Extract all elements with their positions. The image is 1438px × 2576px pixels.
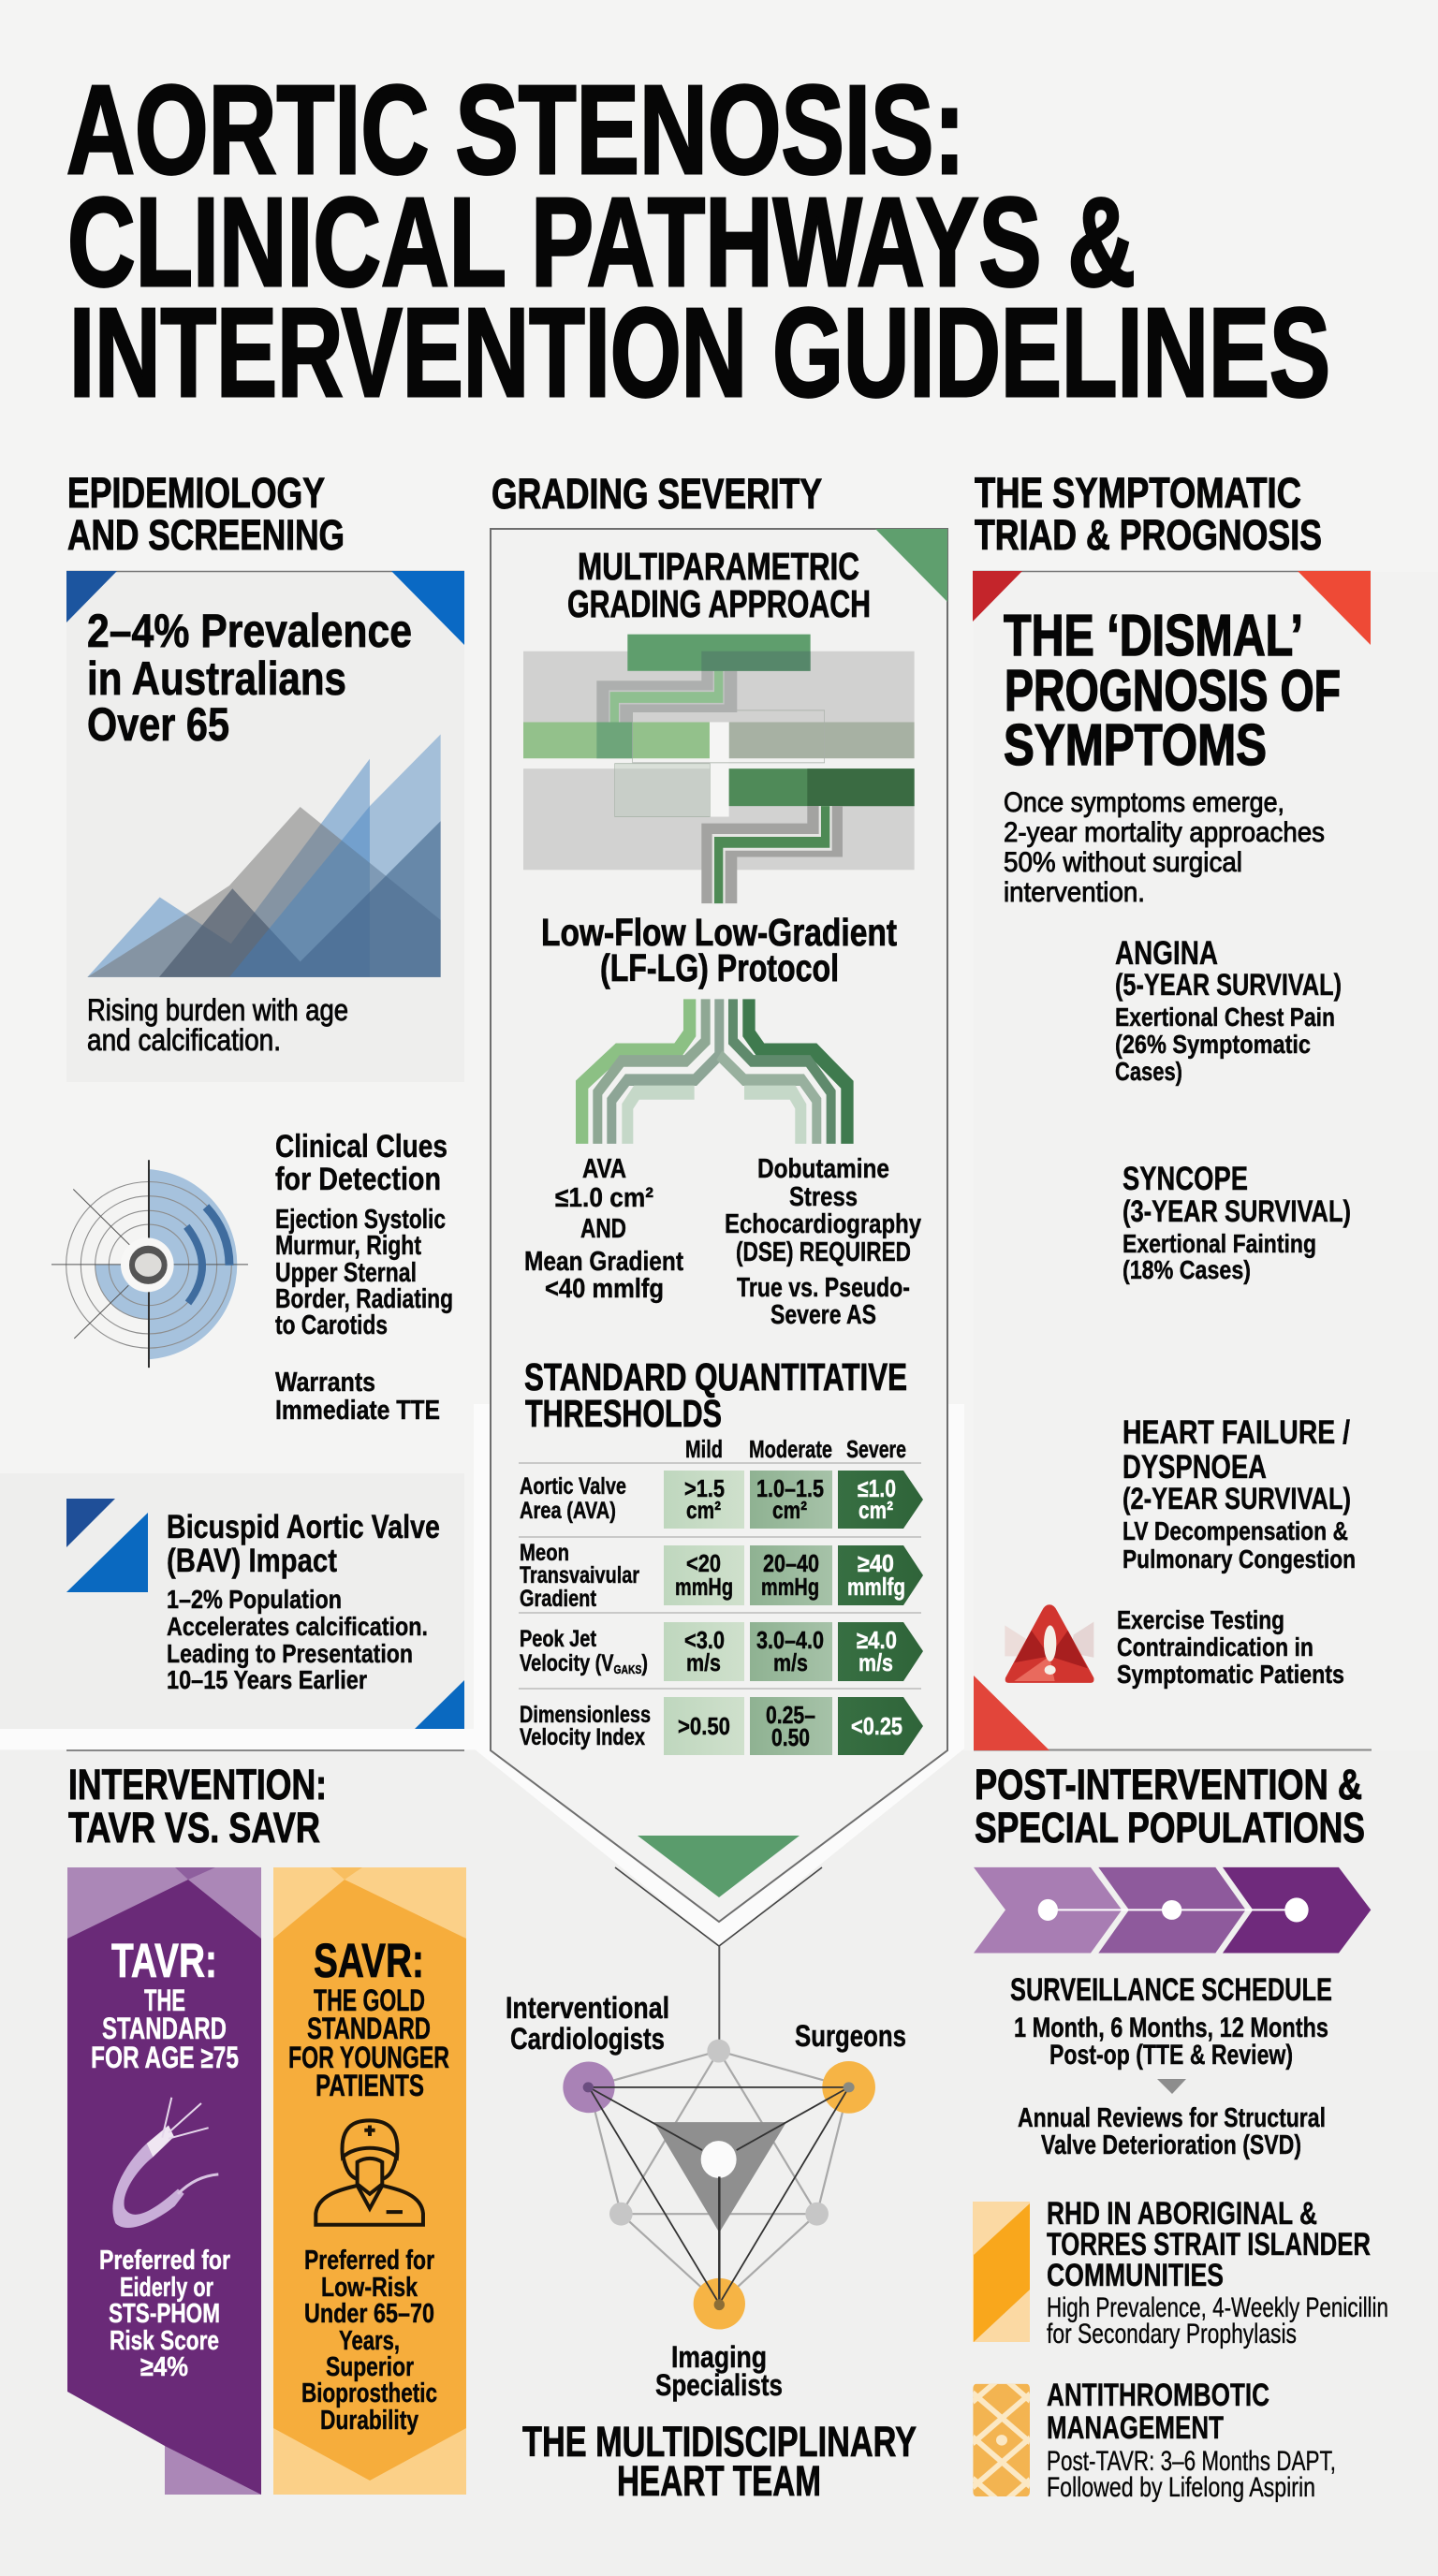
symptom: syncope: (3-YEAR SURVIVAL) xyxy=(1123,1194,1351,1228)
icon: BAV triangles xyxy=(66,1499,148,1592)
antithrombotic text xyxy=(1047,2378,1336,2503)
heading: symptomatic triad: THE SYMPTOMATIC xyxy=(975,469,1301,517)
heart team heading xyxy=(522,2418,917,2505)
clinical clues text: Murmur, Right xyxy=(275,1231,421,1261)
row: peak jet velocity: m/s xyxy=(686,1648,721,1676)
label: interventional cardiologists xyxy=(506,1991,669,2056)
mortality statement: 2-year mortality approaches xyxy=(1004,817,1325,848)
symptom: angina: (26% Symptomatic xyxy=(1115,1030,1311,1059)
mortality statement: intervention. xyxy=(1004,877,1145,908)
red corner bottom left xyxy=(974,1676,1049,1750)
TAVR text bottom: Preferred for xyxy=(99,2246,230,2276)
row: dimensionless velocity index: 0.25– xyxy=(766,1701,815,1729)
row: mean transvalvular gradient: mmHg xyxy=(675,1573,733,1601)
arrow: down xyxy=(1157,2079,1186,2094)
row: aortic valve area: cm² xyxy=(686,1496,721,1524)
row: mean transvalvular gradient: ≥40 xyxy=(858,1549,894,1577)
table header xyxy=(685,1435,906,1463)
symptom: syncope: (18% Cases) xyxy=(1123,1255,1251,1284)
row: dimensionless velocity index: Velocity Index xyxy=(520,1724,645,1750)
RHD text: RHD IN ABORIGINAL & xyxy=(1047,2196,1317,2232)
symptom: heart failure: DYSPNOEA xyxy=(1123,1449,1267,1486)
SAVR text bottom: Low-Risk xyxy=(321,2273,418,2303)
row: peak jet velocity: GAKS xyxy=(614,1662,642,1676)
symptom: syncope xyxy=(1123,1161,1351,1284)
row: aortic valve area: Aortic Valve xyxy=(520,1473,626,1500)
thresholds table xyxy=(519,1435,923,1755)
prevalence caption xyxy=(87,993,348,1057)
SAVR text bottom xyxy=(301,2246,437,2436)
prevalence headline: 2–4% Prevalence xyxy=(87,605,412,657)
red corner top left xyxy=(973,571,1022,622)
row: peak jet velocity xyxy=(520,1622,923,1681)
TAVR text top xyxy=(91,1934,239,2074)
heading: symptomatic triad: TRIAD & PROGNOSIS xyxy=(975,511,1322,559)
panel: symptomatic triad and prognosis xyxy=(973,469,1371,1750)
prevalence caption: and calcification. xyxy=(87,1023,281,1057)
multiparametric heading: GRADING APPROACH xyxy=(567,582,871,625)
label: imaging specialists: Specialists xyxy=(655,2368,783,2402)
symptom: angina: Exertional Chest Pain xyxy=(1115,1003,1335,1032)
row: mean transvalvular gradient: Meon xyxy=(520,1540,569,1566)
heading: symptomatic triad xyxy=(975,469,1322,559)
branch: dobutamine stress echo: Echocardiography xyxy=(725,1209,921,1239)
icon: auscultation radar xyxy=(51,1160,248,1368)
dismal prognosis headline: SYMPTOMS xyxy=(1004,713,1267,778)
SAVR text top: FOR YOUNGER xyxy=(288,2041,449,2074)
heading: post-intervention xyxy=(975,1761,1365,1852)
BAV text: 10–15 Years Earlier xyxy=(167,1665,367,1694)
symptom: heart failure: LV Decompensation & xyxy=(1123,1516,1348,1545)
clinical clues text: to Carotids xyxy=(275,1310,388,1340)
frame with chevron bottom xyxy=(474,529,964,1946)
row: aortic valve area: cm² xyxy=(772,1496,807,1524)
symptom: heart failure: Pulmonary Congestion xyxy=(1123,1544,1356,1573)
branch: AVA criteria xyxy=(524,1154,683,1304)
bicuspid aortic valve panel xyxy=(0,1473,477,1749)
row: aortic valve area: >1.5 xyxy=(684,1474,725,1502)
panel: multidisciplinary heart team xyxy=(506,1946,917,2505)
title xyxy=(66,59,1330,423)
multiparametric heading xyxy=(567,545,871,625)
heading: epidemiology: EPIDEMIOLOGY xyxy=(67,469,325,517)
branching pathway graphic xyxy=(582,999,847,1144)
symptom: angina: ANGINA xyxy=(1115,935,1218,972)
antithrombotic text: Post-TAVR: 3–6 Months DAPT, xyxy=(1047,2446,1336,2477)
clinical clues text xyxy=(275,1129,453,1426)
SAVR text top: PATIENTS xyxy=(315,2069,424,2102)
branch: dobutamine stress echo: Severe AS xyxy=(770,1300,876,1330)
symptom: angina xyxy=(1115,935,1342,1086)
symptom: syncope: SYNCOPE xyxy=(1123,1161,1248,1197)
row: mean transvalvular gradient: 20–40 xyxy=(763,1549,819,1577)
surveillance schedule: Post-op (TTE & Review) xyxy=(1049,2040,1293,2071)
clinical clues text: Warrants xyxy=(275,1368,375,1398)
BAV text: 1–2% Population xyxy=(167,1585,342,1614)
symptom: angina: Cases) xyxy=(1115,1057,1182,1086)
row: aortic valve area: 1.0–1.5 xyxy=(756,1474,824,1502)
node: interventional cardiologists xyxy=(563,2062,615,2113)
row: peak jet velocity: Velocity (V xyxy=(520,1650,638,1676)
TAVR text bottom xyxy=(99,2246,230,2382)
SAVR ribbon xyxy=(273,1867,466,2495)
RHD text: for Secondary Prophylasis xyxy=(1047,2319,1297,2349)
surveillance schedule: Valve Deterioration (SVD) xyxy=(1041,2130,1301,2160)
branch: dobutamine stress echo: (DSE) REQUIRED xyxy=(736,1237,911,1267)
clinical clues text: Immediate TTE xyxy=(275,1396,440,1426)
low-flow low-gradient heading: (LF-LG) Protocol xyxy=(600,946,839,989)
panel: post-intervention and special populations xyxy=(973,1761,1388,2529)
symptom: heart failure xyxy=(1123,1414,1356,1573)
surveillance schedule xyxy=(1010,1972,1332,2160)
row: mean transvalvular gradient xyxy=(520,1540,923,1612)
dismal prognosis headline: THE ‘DISMAL’ xyxy=(1004,604,1303,668)
branch: AVA criteria: Mean Gradient xyxy=(524,1247,683,1277)
symptom: heart failure: HEART FAILURE / xyxy=(1123,1414,1350,1451)
TAVR ribbon xyxy=(67,1867,261,2495)
row: mean transvalvular gradient: Gradient xyxy=(520,1586,597,1612)
RHD text xyxy=(1047,2196,1388,2349)
SAVR text bottom: Bioprosthetic xyxy=(301,2378,437,2408)
exercise testing contraindication: Exercise Testing xyxy=(1117,1605,1284,1634)
BAV text: (BAV) Impact xyxy=(167,1543,337,1579)
row: mean transvalvular gradient: Transvaivular xyxy=(520,1562,639,1588)
prevalence headline: Over 65 xyxy=(87,698,229,751)
label: imaging specialists xyxy=(655,2340,783,2402)
row: aortic valve area: ≤1.0 xyxy=(858,1474,896,1502)
clinical clues text: for Detection xyxy=(275,1162,441,1197)
row: aortic valve area: Area (AVA) xyxy=(520,1498,616,1524)
SAVR text top xyxy=(288,1934,449,2102)
heading: epidemiology: AND SCREENING xyxy=(67,511,345,559)
clinical clues text: Border, Radiating xyxy=(275,1284,453,1314)
node: surgeons xyxy=(822,2061,875,2114)
row: mean transvalvular gradient: <20 xyxy=(686,1549,721,1577)
TAVR text bottom: STS-PHOM xyxy=(109,2299,220,2329)
branch: dobutamine stress echo: True vs. Pseudo- xyxy=(737,1273,910,1303)
prevalence caption: Rising burden with age xyxy=(87,993,348,1027)
exercise testing contraindication xyxy=(1117,1605,1344,1689)
icon: antithrombotic lattice xyxy=(973,2383,1030,2496)
chevron timeline xyxy=(974,1867,1371,1953)
thresholds heading xyxy=(524,1355,907,1435)
TAVR text top: THE xyxy=(144,1983,185,2017)
SAVR text top: THE GOLD xyxy=(314,1983,425,2017)
prevalence headline xyxy=(87,605,412,751)
arrow: green down triangle xyxy=(638,1836,800,1897)
row: peak jet velocity: ≥4.0 xyxy=(857,1626,897,1654)
SAVR text bottom: Superior xyxy=(326,2352,414,2382)
branch: dobutamine stress echo: Dobutamine xyxy=(757,1154,889,1184)
heading: epidemiology xyxy=(67,469,345,559)
low-flow low-gradient heading xyxy=(541,911,897,989)
SAVR text top: SAVR: xyxy=(314,1934,424,1987)
node: imaging specialists xyxy=(694,2278,745,2330)
row: dimensionless velocity index: Dimensionless xyxy=(520,1702,651,1728)
RHD text: COMMUNITIES xyxy=(1047,2258,1224,2293)
row: dimensionless velocity index: >0.50 xyxy=(678,1712,730,1740)
row: peak jet velocity: <3.0 xyxy=(684,1626,725,1654)
row: peak jet velocity: Peok Jet xyxy=(520,1626,597,1652)
symptom: heart failure: (2-YEAR SURVIVAL) xyxy=(1123,1482,1351,1515)
heart team heading: THE MULTIDISCIPLINARY xyxy=(522,2418,917,2466)
symptom: angina: (5-YEAR SURVIVAL) xyxy=(1115,968,1342,1002)
branch: dobutamine stress echo xyxy=(725,1154,921,1330)
antithrombotic text: Followed by Lifelong Aspirin xyxy=(1047,2472,1315,2503)
title: AORTIC STENOSIS: xyxy=(66,59,965,200)
surveillance schedule: SURVEILLANCE SCHEDULE xyxy=(1010,1972,1332,2008)
prevalence headline: in Australians xyxy=(87,652,346,705)
BAV text: Accelerates calcification. xyxy=(167,1612,428,1641)
label: surgeons: Surgeons xyxy=(795,2019,906,2053)
row: dimensionless velocity index: <0.25 xyxy=(851,1712,902,1740)
row: peak jet velocity: ) xyxy=(641,1650,648,1676)
icon: RHD ribbon xyxy=(973,2202,1030,2342)
antithrombotic text: MANAGEMENT xyxy=(1047,2410,1224,2446)
row: aortic valve area: cm² xyxy=(858,1496,893,1524)
TAVR text top: TAVR: xyxy=(111,1934,217,1987)
TAVR text bottom: Risk Score xyxy=(110,2326,219,2356)
clinical clues text: Ejection Systolic xyxy=(275,1205,446,1235)
branch: dobutamine stress echo: Stress xyxy=(789,1182,858,1212)
table header: Moderate xyxy=(749,1435,832,1463)
SAVR text bottom: Years, xyxy=(339,2326,400,2356)
row: mean transvalvular gradient: mmHg xyxy=(761,1573,819,1601)
row: mean transvalvular gradient: mmlfg xyxy=(847,1573,905,1601)
row: peak jet velocity: m/s xyxy=(858,1648,893,1676)
row: dimensionless velocity index: 0.50 xyxy=(771,1723,810,1751)
BAV text: Leading to Presentation xyxy=(167,1639,413,1668)
table header: Mild xyxy=(685,1435,723,1463)
thresholds heading: STANDARD QUANTITATIVE xyxy=(524,1355,907,1398)
area chart: rising prevalence xyxy=(87,734,441,977)
mortality statement: 50% without surgical xyxy=(1004,847,1242,878)
SAVR text top: STANDARD xyxy=(307,2012,431,2045)
surveillance schedule: Annual Reviews for Structural xyxy=(1018,2103,1326,2133)
thresholds heading: THRESHOLDS xyxy=(525,1392,722,1435)
network diagram xyxy=(563,1946,875,2330)
panel: intervention TAVR vs SAVR xyxy=(67,1761,466,2495)
TAVR text top: FOR AGE ≥75 xyxy=(91,2041,239,2074)
icon: TAVR catheter xyxy=(112,2098,218,2228)
panel: epidemiology and screening xyxy=(0,469,477,1749)
TAVR text bottom: Eiderly or xyxy=(120,2273,213,2303)
multiparametric flow graphic xyxy=(523,635,915,903)
exercise testing contraindication: Symptomatic Patients xyxy=(1117,1660,1344,1689)
surveillance schedule: 1 Month, 6 Months, 12 Months xyxy=(1014,2012,1328,2043)
heading: intervention: TAVR VS. SAVR xyxy=(68,1804,320,1852)
clinical clues text: Clinical Clues xyxy=(275,1129,448,1164)
low-flow low-gradient heading: Low-Flow Low-Gradient xyxy=(541,911,897,954)
prevalence card xyxy=(66,571,464,1082)
multiparametric heading: MULTIPARAMETRIC xyxy=(578,545,859,588)
row: aortic valve area xyxy=(520,1471,923,1529)
branch: AVA criteria: AND xyxy=(580,1214,626,1244)
row: dimensionless velocity index xyxy=(520,1697,923,1755)
label: interventional cardiologists: Interventional xyxy=(506,1991,669,2025)
row: peak jet velocity: m/s xyxy=(773,1648,808,1676)
branch: AVA criteria: AVA xyxy=(582,1154,626,1184)
heading: grading severity: GRADING SEVERITY xyxy=(492,470,822,518)
symptom: syncope: Exertional Fainting xyxy=(1123,1229,1316,1258)
BAV text: Bicuspid Aortic Valve xyxy=(167,1509,440,1545)
heading: intervention: INTERVENTION: xyxy=(68,1761,327,1808)
SAVR text bottom: Durability xyxy=(320,2406,418,2436)
row: peak jet velocity: 3.0–4.0 xyxy=(756,1626,824,1654)
heart team heading: HEART TEAM xyxy=(617,2457,821,2505)
SAVR text bottom: Preferred for xyxy=(304,2246,434,2276)
exercise testing contraindication: Contraindication in xyxy=(1117,1632,1313,1661)
icon: warning triangle xyxy=(1005,1604,1094,1683)
dismal prognosis headline xyxy=(1004,604,1341,778)
antithrombotic text: ANTITHROMBOTIC xyxy=(1047,2378,1269,2413)
mortality statement: Once symptoms emerge, xyxy=(1004,787,1284,818)
TAVR text top: STANDARD xyxy=(102,2012,227,2045)
label: imaging specialists: Imaging xyxy=(671,2340,767,2374)
heading: intervention xyxy=(68,1761,327,1852)
icon: surgeon xyxy=(315,2120,423,2225)
SAVR text bottom: Under 65–70 xyxy=(304,2299,434,2329)
mortality statement xyxy=(1004,787,1325,908)
red corner top right xyxy=(1298,571,1371,645)
branch: AVA criteria: ≤1.0 cm² xyxy=(555,1183,653,1213)
TAVR text bottom: ≥4% xyxy=(140,2352,188,2382)
label: interventional cardiologists: Cardiologists xyxy=(510,2022,665,2056)
branch: AVA criteria: <40 mmlfg xyxy=(545,1274,664,1304)
panel: grading severity xyxy=(474,470,964,1946)
clinical clues text: Upper Sternal xyxy=(275,1258,417,1288)
table header: Severe xyxy=(846,1435,906,1463)
BAV text xyxy=(167,1509,440,1694)
